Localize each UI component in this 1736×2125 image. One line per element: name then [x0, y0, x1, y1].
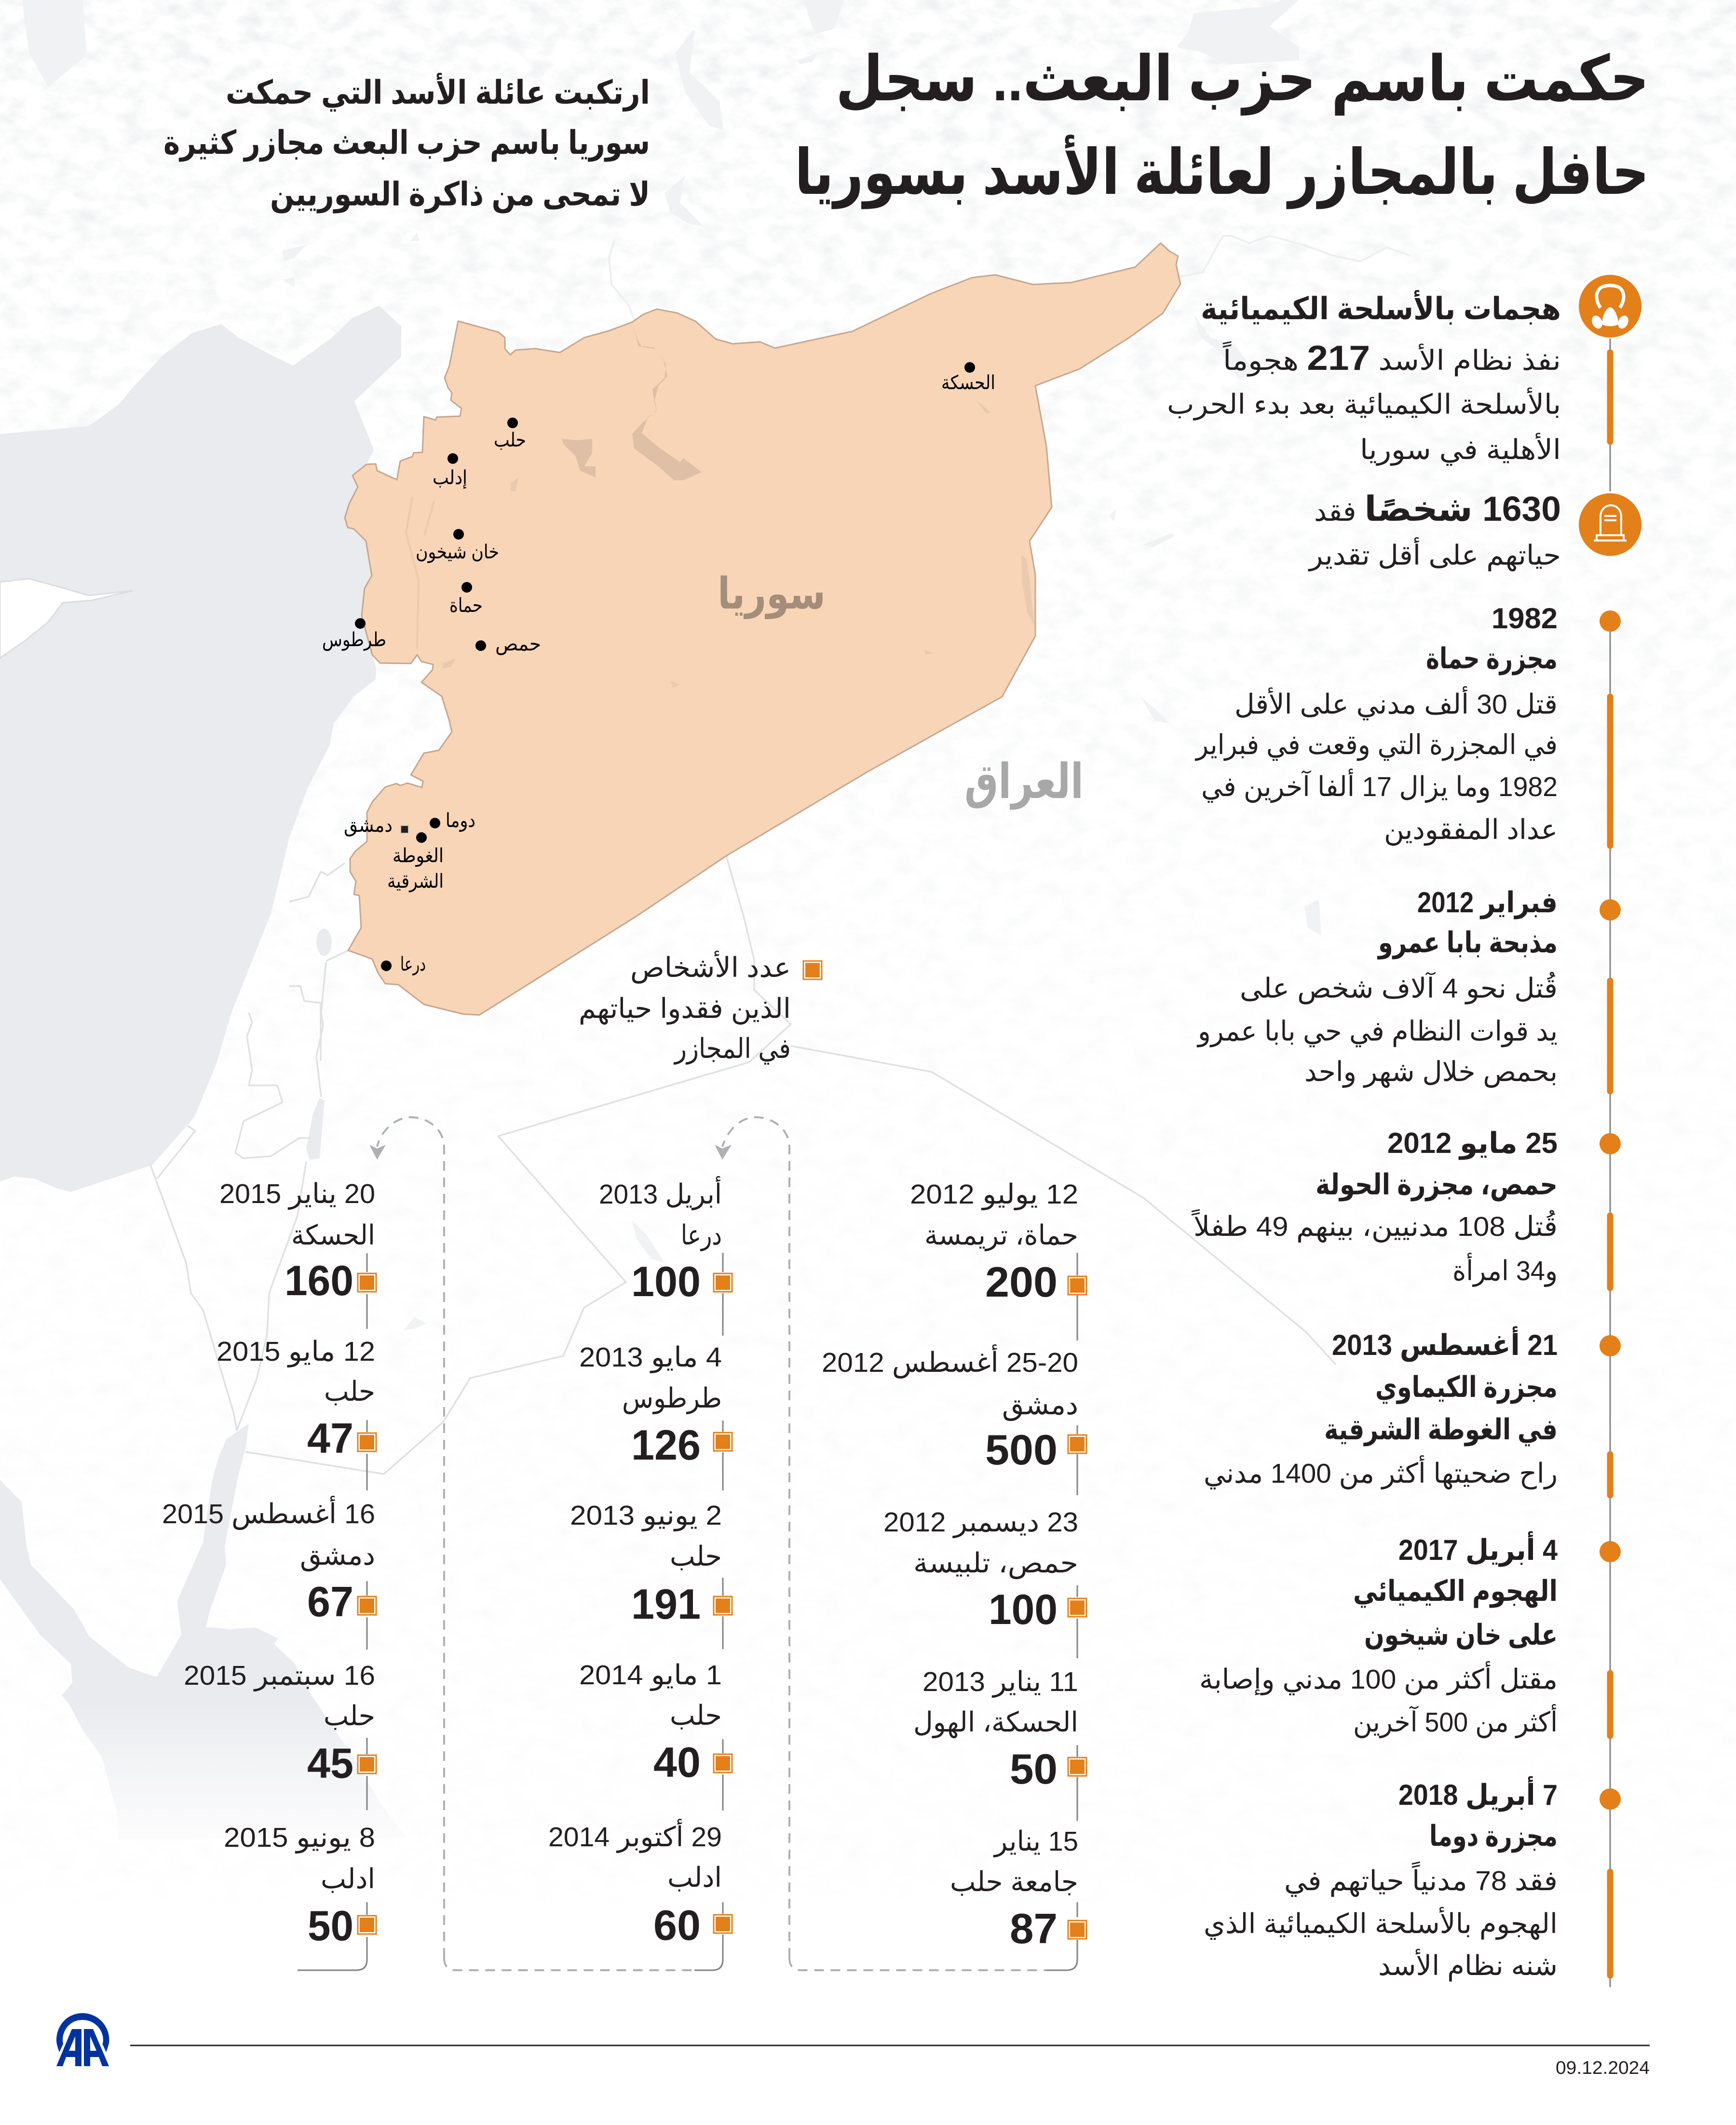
- massacre: Damascus Aug 2012: 500: [985, 1426, 1058, 1474]
- massacre: Aleppo May 2015: حلب: [324, 1376, 375, 1407]
- timeline: Baba Amr 2012: بحمص خلال شهر واحد: [1304, 1056, 1558, 1088]
- timeline: Hama 1982: في المجزرة التي وقعت في فبراير: [1194, 730, 1558, 761]
- city marker: Homs: حمص: [495, 634, 541, 655]
- dashed connector: column one to column two: [715, 1117, 1046, 1970]
- legend: في المجازر: [673, 1033, 791, 1065]
- timeline: Hama 1982: عداد المفقودين: [1384, 814, 1558, 846]
- panel: victims of chemical attacks: [1308, 490, 1561, 571]
- massacre: Tartus 2013: [579, 1342, 732, 1469]
- massacre: Damascus Aug 2015: 67: [307, 1578, 353, 1625]
- massacre: Tremseh: 200: [985, 1258, 1058, 1306]
- timeline: Baba Amr 2012: مذبحة بابا عمرو: [1377, 926, 1558, 960]
- city marker: Idlib: إدلب: [433, 467, 467, 489]
- timeline: Ghouta 2013: راح ضحيتها أكثر من 1400 مدني: [1204, 1455, 1558, 1489]
- city marker: Eastern Ghouta: الشرقية: [387, 871, 444, 893]
- city marker: Aleppo: حلب: [494, 430, 526, 451]
- title: [795, 43, 1649, 209]
- timeline: Houla 2012: و34 امرأة: [1452, 1253, 1558, 1287]
- massacre: Aleppo June 2013: [570, 1500, 732, 1628]
- panel: chemical attacks: [1167, 290, 1561, 466]
- legend: [579, 950, 822, 1065]
- dashed connector: column two to column three: [369, 1117, 694, 1970]
- massacre: Aleppo Sep 2015: 16 سبتمبر 2015: [184, 1660, 375, 1692]
- massacre: Aleppo University: [950, 1826, 1086, 1952]
- massacre: Tartus 2013: 4 مايو 2013: [579, 1342, 722, 1373]
- massacre: Tremseh: 12 يوليو 2012: [910, 1179, 1078, 1210]
- massacre: Idlib Oct 2014: 29 أكتوبر 2014: [548, 1819, 722, 1853]
- timeline: Khan Shaykhun 2017: الهجوم الكيميائي: [1353, 1575, 1558, 1608]
- massacre: Aleppo May 2014: 1 مايو 2014: [579, 1660, 722, 1691]
- massacre: Aleppo Sep 2015: [184, 1660, 376, 1787]
- panel: chemical attacks: بالأسلحة الكيميائية بعد بدء الحرب: [1167, 387, 1561, 420]
- country label: Iraq: العراق: [964, 755, 1084, 810]
- subtitle: ارتكبت عائلة الأسد التي حمكت: [226, 72, 650, 112]
- column 3 leader lines: [298, 1253, 367, 1970]
- timeline: Baba Amr 2012: [1196, 886, 1621, 1088]
- panel: victims of chemical attacks: 1630 شخصًا فقد: [1314, 490, 1561, 528]
- city marker: Hama: [449, 582, 483, 616]
- massacre: Idlib June 2015: ادلب: [321, 1864, 375, 1895]
- timeline: Baba Amr 2012: يد قوات النظام في حي بابا عمرو: [1196, 1016, 1558, 1047]
- massacre: Aleppo University: جامعة حلب: [950, 1867, 1078, 1897]
- massacre: Idlib Oct 2014: [548, 1819, 732, 1949]
- timeline spine: vertical line: [1610, 338, 1611, 1987]
- smaller lakes: [442, 400, 1034, 688]
- timeline: Hama 1982: [1194, 602, 1621, 846]
- massacre: Al-Hol: الحسكة، الهول: [913, 1707, 1078, 1738]
- logo: Anadolu Agency: [56, 2013, 109, 2066]
- massacre: Aleppo May 2014: حلب: [670, 1700, 722, 1731]
- footer rule: [130, 2044, 1650, 2046]
- timeline: Baba Amr 2012: فبراير 2012: [1417, 886, 1558, 920]
- panel: victims of chemical attacks: حياتهم على أقل تقدير: [1308, 537, 1561, 571]
- timeline: Houla 2012: [1192, 1127, 1621, 1287]
- timeline: Douma 2018: 7 أبريل 2018: [1398, 1776, 1558, 1812]
- city marker: Douma: [430, 810, 475, 832]
- timeline: Ghouta 2013: [1204, 1326, 1621, 1489]
- subtitle: لا تمحى من ذاكرة السوريين: [270, 176, 650, 214]
- city marker: Khan Shaykhun: [416, 529, 499, 563]
- country borders: [245, 856, 791, 1474]
- massacre: Aleppo May 2015: 12 مايو 2015: [217, 1336, 375, 1367]
- timeline: Ghouta 2013: 21 أغسطس 2013: [1332, 1326, 1558, 1362]
- city marker: Hasakah: الحسكة: [941, 372, 995, 393]
- massacre: Tartus 2013: 126: [631, 1421, 701, 1469]
- icon: gravestone: [1579, 493, 1641, 556]
- timeline: Douma 2018: [1204, 1776, 1621, 1982]
- city marker: Homs: [475, 634, 541, 655]
- massacre: Aleppo May 2014: [579, 1660, 732, 1786]
- timeline: Hama 1982: 1982 وما يزال 17 ألفا آخرين في: [1201, 769, 1558, 803]
- city marker: Aleppo: [494, 418, 526, 451]
- massacre: Tremseh: [910, 1179, 1086, 1306]
- massacre: Damascus Aug 2015: 16 أغسطس 2015: [162, 1496, 375, 1530]
- massacre: Damascus Aug 2015: دمشق: [300, 1540, 375, 1571]
- timeline: Houla 2012: 25 مايو 2012: [1387, 1127, 1558, 1160]
- city marker: Hama: حماة: [449, 595, 483, 616]
- city marker: Daraa: درعا: [400, 954, 426, 975]
- country label: Syria: سوريا: [718, 570, 826, 619]
- city marker: Eastern Ghouta: [387, 832, 444, 893]
- massacre: Idlib June 2015: 50: [308, 1902, 353, 1949]
- massacre: Aleppo June 2013: حلب: [670, 1541, 722, 1572]
- massacre: Hasakah 2015: [219, 1178, 376, 1304]
- massacre: Talbiseh: حمص، تلبيسة: [913, 1548, 1078, 1579]
- timeline: Ghouta 2013: في الغوطة الشرقية: [1324, 1413, 1558, 1447]
- massacre: Al-Hol: 50: [1010, 1745, 1058, 1793]
- Lake Jabboul: [562, 439, 596, 477]
- timeline: Khan Shaykhun 2017: 4 أبريل 2017: [1398, 1531, 1558, 1567]
- massacre: Talbiseh: 23 ديسمبر 2012: [883, 1507, 1078, 1538]
- massacre: Daraa 2013: [599, 1176, 732, 1305]
- massacre: Hasakah 2015: 160: [285, 1257, 353, 1304]
- background map of the region: [0, 0, 1410, 1840]
- massacre: Damascus Aug 2012: 25-20 أغسطس 2012: [822, 1344, 1078, 1379]
- city marker: Khan Shaykhun: خان شيخون: [416, 541, 499, 563]
- timeline: Hama 1982: قتل 30 ألف مدني على الأقل: [1234, 686, 1558, 720]
- timeline: Houla 2012: حمص، مجزرة الحولة: [1316, 1168, 1558, 1202]
- city marker: Hasakah: [941, 362, 995, 393]
- island: Cyprus: [0, 579, 133, 658]
- massacre: Talbiseh: 100: [989, 1585, 1058, 1633]
- massacre: Al-Hol: [913, 1666, 1086, 1793]
- massacre: Aleppo Sep 2015: حلب: [324, 1701, 375, 1732]
- Euphrates river and Lake Assad: [632, 322, 702, 480]
- city marker: Tartus: [322, 618, 386, 651]
- massacre: Talbiseh: [883, 1507, 1086, 1633]
- column 2 leader lines: [694, 1253, 723, 1970]
- massacre: Aleppo June 2013: 2 يونيو 2013: [570, 1500, 722, 1531]
- column 1 leader lines: [1046, 1253, 1077, 1970]
- massacre: Aleppo University: 15 يناير: [993, 1826, 1078, 1857]
- massacre: Idlib Oct 2014: ادلب: [667, 1862, 722, 1893]
- date: 09.12.2024: [1556, 2058, 1650, 2078]
- massacre: Idlib June 2015: 8 يونيو 2015: [224, 1822, 375, 1854]
- massacre: Hasakah 2015: الحسكة: [291, 1220, 375, 1251]
- timeline: Khan Shaykhun 2017: [1199, 1531, 1621, 1738]
- timeline: Douma 2018: مجزرة دوما: [1429, 1820, 1558, 1853]
- panel: chemical attacks: نفذ نظام الأسد 217 هجوماً: [1223, 339, 1561, 378]
- map: Syria: [322, 243, 1180, 1015]
- massacre: Aleppo University: 87: [1010, 1905, 1058, 1952]
- timeline: Ghouta 2013: مجزرة الكيماوي: [1375, 1371, 1558, 1404]
- massacre: Hasakah 2015: 20 يناير 2015: [219, 1178, 375, 1210]
- Red Sea gulfs: [0, 1423, 406, 1840]
- legend: الذين فقدوا حياتهم: [579, 993, 791, 1025]
- panel: chemical attacks: الأهلية في سوريا: [1360, 433, 1561, 466]
- timeline: Hama 1982: 1982: [1492, 602, 1558, 635]
- timeline: Houla 2012: قُتل 108 مدنيين، بينهم 49 طفلاً: [1192, 1209, 1558, 1243]
- lakes and reservoirs: [306, 1098, 325, 1160]
- massacre: Idlib June 2015: [224, 1822, 376, 1949]
- massacre: Tremseh: حماة، تريمسة: [924, 1220, 1078, 1251]
- subtitle: سوريا باسم حزب البعث مجازر كثيرة: [163, 124, 650, 162]
- massacre: Aleppo May 2014: 40: [653, 1738, 701, 1786]
- massacre: Damascus Aug 2015: [162, 1496, 376, 1625]
- timeline: Douma 2018: شنه نظام الأسد: [1378, 1949, 1558, 1982]
- massacre: Tartus 2013: طرطوس: [622, 1383, 722, 1414]
- city marker: Eastern Ghouta: الغوطة: [393, 845, 444, 867]
- icon: gas mask: [1579, 275, 1641, 338]
- city marker: Damascus: دمشق: [344, 815, 393, 837]
- city marker: Daraa: [381, 954, 426, 975]
- massacre: Damascus Aug 2012: دمشق: [1002, 1390, 1078, 1421]
- massacre: Aleppo May 2015: [217, 1336, 376, 1462]
- timeline: Douma 2018: الهجوم بالأسلحة الكيميائية الذي: [1204, 1907, 1558, 1940]
- timeline: Douma 2018: فقد 78 مدنياً حياتهم في: [1284, 1861, 1558, 1897]
- massacre: Idlib Oct 2014: 60: [653, 1901, 701, 1949]
- massacre: Al-Hol: 11 يناير 2013: [922, 1666, 1078, 1698]
- city marker: Idlib: [433, 453, 467, 489]
- massacre: Aleppo May 2015: 47: [307, 1414, 353, 1462]
- city marker: Douma: دوما: [446, 810, 475, 832]
- massacre: Aleppo June 2013: 191: [631, 1580, 701, 1628]
- subtitle: [163, 72, 650, 214]
- panel: chemical attacks: هجمات بالأسلحة الكيميائية: [1201, 290, 1561, 326]
- massacre: Daraa 2013: 100: [631, 1258, 701, 1305]
- massacre: Damascus Aug 2012: [822, 1344, 1086, 1474]
- massacre: Aleppo Sep 2015: 45: [307, 1739, 353, 1787]
- timeline: Khan Shaykhun 2017: أكثر من 500 آخرين: [1353, 1704, 1558, 1738]
- massacre: Daraa 2013: درعا: [681, 1220, 722, 1251]
- timeline: Baba Amr 2012: قُتل نحو 4 آلاف شخص على: [1240, 971, 1558, 1004]
- timeline: Khan Shaykhun 2017: على خان شيخون: [1364, 1619, 1558, 1652]
- massacre: Daraa 2013: أبريل 2013: [599, 1176, 722, 1210]
- city marker: Tartus: طرطوس: [322, 629, 386, 651]
- timeline: Hama 1982: مجزرة حماة: [1426, 642, 1558, 676]
- legend: عدد الأشخاص: [630, 950, 791, 984]
- timeline thick orange segments: [1607, 352, 1614, 1976]
- timeline: Khan Shaykhun 2017: مقتل أكثر من 100 مدني وإصابة: [1199, 1661, 1558, 1696]
